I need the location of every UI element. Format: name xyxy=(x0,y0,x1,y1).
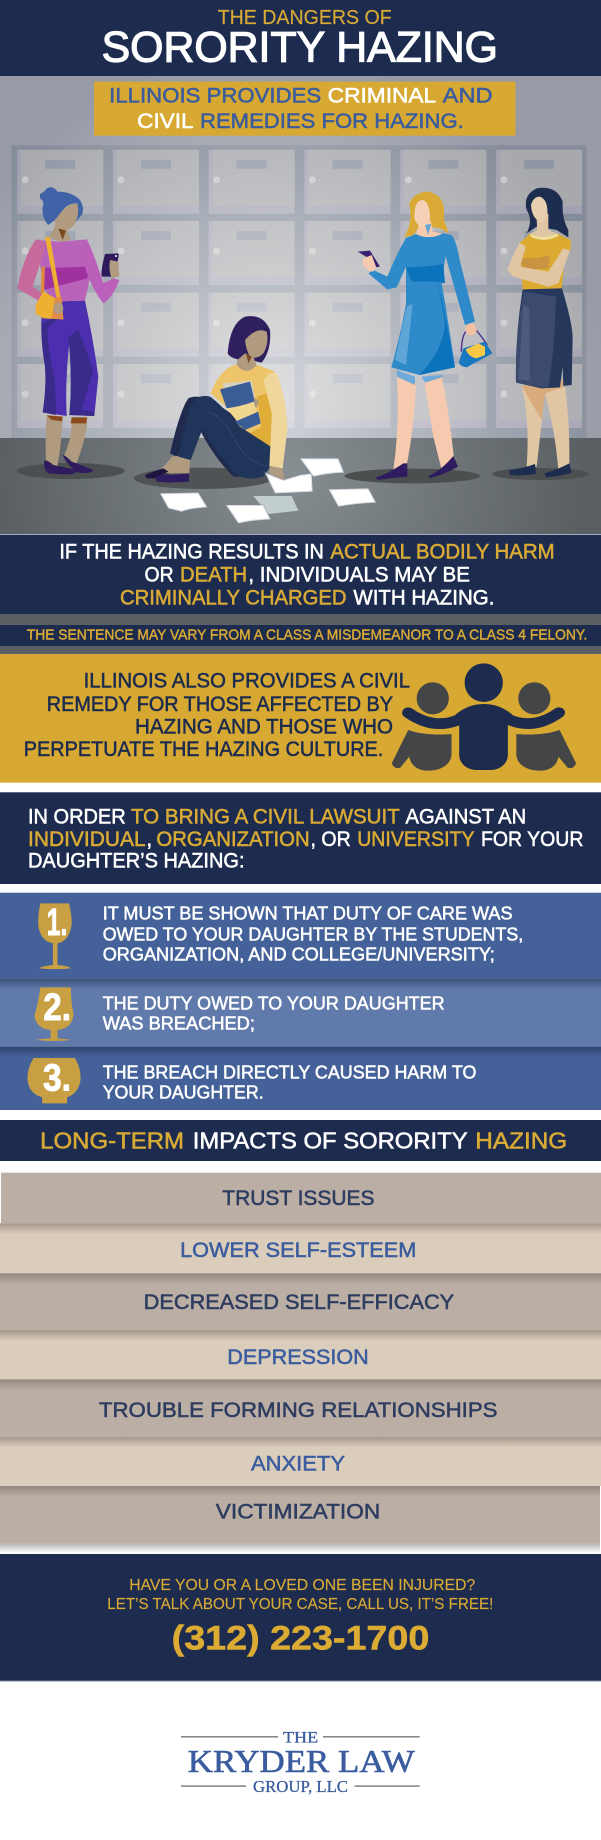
header xyxy=(0,0,601,76)
panel: call to action: LET’S TALK ABOUT YOUR CASE, CALL US, IT’S FREE! xyxy=(107,1596,493,1613)
impacts list xyxy=(0,1173,601,1553)
impact: trouble forming relationships xyxy=(0,1379,601,1437)
wall xyxy=(0,76,601,438)
heading: long-term impacts: LONG-TERM xyxy=(40,1127,184,1153)
step 3: YOUR DAUGHTER. xyxy=(103,1081,264,1102)
impact: trouble forming relationships: TROUBLE FORMING RELATIONSHIPS xyxy=(99,1398,498,1422)
illustration: hallway with lockers and students xyxy=(0,76,601,534)
impact: depression xyxy=(0,1330,601,1379)
panel: civil lawsuit requirements intro: DAUGHTER’S HAZING: xyxy=(28,850,244,873)
impact: depression: DEPRESSION xyxy=(227,1345,369,1369)
banner: illinois provides remedies: AND xyxy=(443,84,493,107)
panel: call to action xyxy=(0,1554,601,1682)
impact: lower self-esteem: LOWER SELF-ESTEEM xyxy=(180,1238,416,1262)
panel: criminal charges: WITH HAZING. xyxy=(353,586,494,609)
panel: criminal charges: CRIMINALLY CHARGED xyxy=(120,586,346,609)
step 1 xyxy=(0,893,601,978)
banner: illinois provides remedies: ILLINOIS PROVIDES xyxy=(109,84,321,107)
panel: criminal charges: OR xyxy=(144,564,174,587)
step 3: THE BREACH DIRECTLY CAUSED HARM TO xyxy=(103,1061,476,1082)
floor xyxy=(0,438,601,534)
impact: trust issues: TRUST ISSUES xyxy=(222,1186,374,1210)
kicker: the dangers of: THE DANGERS OF xyxy=(218,7,392,29)
panel: criminal charges: IF THE HAZING RESULTS IN xyxy=(59,540,324,563)
panel: call to action: HAVE YOU OR A LOVED ONE BEEN INJURED? xyxy=(129,1577,475,1594)
step 1: ORGANIZATION, AND COLLEGE/UNIVERSITY; xyxy=(103,943,495,964)
panel: civil lawsuit requirements intro: , xyxy=(146,828,152,851)
panel: civil lawsuit requirements intro: INDIVIDUAL xyxy=(28,828,146,851)
panel: civil lawsuit requirements intro: UNIVERSITY xyxy=(357,828,474,851)
figure: standing woman with crossed arms in navy skirt xyxy=(492,188,589,480)
panel: civil lawsuit requirements intro: IN ORDER xyxy=(28,805,126,828)
lockers xyxy=(0,76,601,438)
heading: long-term impacts: IMPACTS OF SORORITY xyxy=(193,1127,468,1153)
panel: civil lawsuit requirements intro: AGAINST AN xyxy=(406,805,526,828)
impact: trust issues xyxy=(1,1173,601,1223)
grey strip behind criminal text xyxy=(0,614,601,654)
step 1: 1. xyxy=(47,902,67,944)
impact: lower self-esteem xyxy=(0,1223,601,1273)
impact: anxiety xyxy=(0,1437,601,1486)
logo: the kryder law group: THE xyxy=(283,1729,318,1746)
panel: civil lawsuit requirements intro: , OR xyxy=(310,828,351,851)
title: SORORITY HAZING xyxy=(102,23,498,71)
banner: illinois provides remedies: REMEDIES FOR HAZING. xyxy=(200,110,464,133)
banner: illinois provides remedies: CRIMINAL xyxy=(328,84,436,107)
step 1: OWED TO YOUR DAUGHTER BY THE STUDENTS, xyxy=(103,923,523,944)
step 2 xyxy=(0,978,601,1047)
step 1: IT MUST BE SHOWN THAT DUTY OF CARE WAS xyxy=(103,902,512,923)
panel: civil lawsuit requirements intro: ORGANIZATION xyxy=(156,828,310,851)
phone number: (312) 223-1700 xyxy=(172,1619,429,1657)
panel: civil lawsuit requirements intro: FOR YOUR xyxy=(481,828,583,851)
civil remedy text: PERPETUATE THE HAZING CULTURE. xyxy=(24,738,383,761)
impact: decreased self-efficacy: DECREASED SELF-EFFICACY xyxy=(144,1290,454,1314)
step 2: THE DUTY OWED TO YOUR DAUGHTER xyxy=(103,992,445,1013)
figure: standing woman in purple with phone xyxy=(17,187,125,479)
heading: long-term impacts xyxy=(0,1120,601,1161)
step 2: WAS BREACHED; xyxy=(103,1013,255,1034)
impact: victimization xyxy=(0,1486,600,1553)
civil remedy text: HAZING AND THOSE WHO xyxy=(135,716,393,739)
panel: criminal charges: ACTUAL BODILY HARM xyxy=(330,540,555,563)
banner: illinois provides remedies xyxy=(94,82,516,136)
icon: three people embracing xyxy=(392,663,576,771)
panel: criminal charges xyxy=(0,535,601,614)
panel: criminal charges: , INDIVIDUALS MAY BE xyxy=(248,564,470,587)
impact: anxiety: ANXIETY xyxy=(251,1451,345,1475)
icon: tall wine glass xyxy=(38,903,72,969)
figure: standing woman in blue dress with phone and purse xyxy=(344,192,492,483)
scattered papers xyxy=(160,458,376,523)
civil remedy text: ILLINOIS ALSO PROVIDES A CIVIL xyxy=(84,670,410,693)
impact: victimization: VICTIMIZATION xyxy=(216,1499,380,1523)
logo: the kryder law group xyxy=(181,1729,420,1796)
icon: tulip glass xyxy=(34,987,74,1041)
step 3 xyxy=(0,1047,601,1110)
panel: civil remedy xyxy=(0,654,601,783)
logo: the kryder law group: GROUP, LLC xyxy=(253,1777,348,1796)
banner: illinois provides remedies: CIVIL xyxy=(137,110,194,133)
panel: criminal charges: DEATH xyxy=(180,564,247,587)
step 2: 2. xyxy=(43,987,71,1029)
panel: civil lawsuit requirements intro: TO BRING A CIVIL LAWSUIT xyxy=(131,805,400,828)
figure: seated woman with books xyxy=(134,316,287,489)
impact: decreased self-efficacy xyxy=(0,1273,601,1330)
panel: civil lawsuit requirements intro xyxy=(0,792,601,884)
civil remedy text: REMEDY FOR THOSE AFFECTED BY xyxy=(47,693,393,716)
logo: the kryder law group: KRYDER LAW xyxy=(188,1743,416,1779)
heading: long-term impacts: HAZING xyxy=(475,1127,567,1153)
icon: snifter glass xyxy=(28,1058,81,1103)
civil remedy text xyxy=(24,670,410,761)
step 3: 3. xyxy=(43,1058,71,1100)
